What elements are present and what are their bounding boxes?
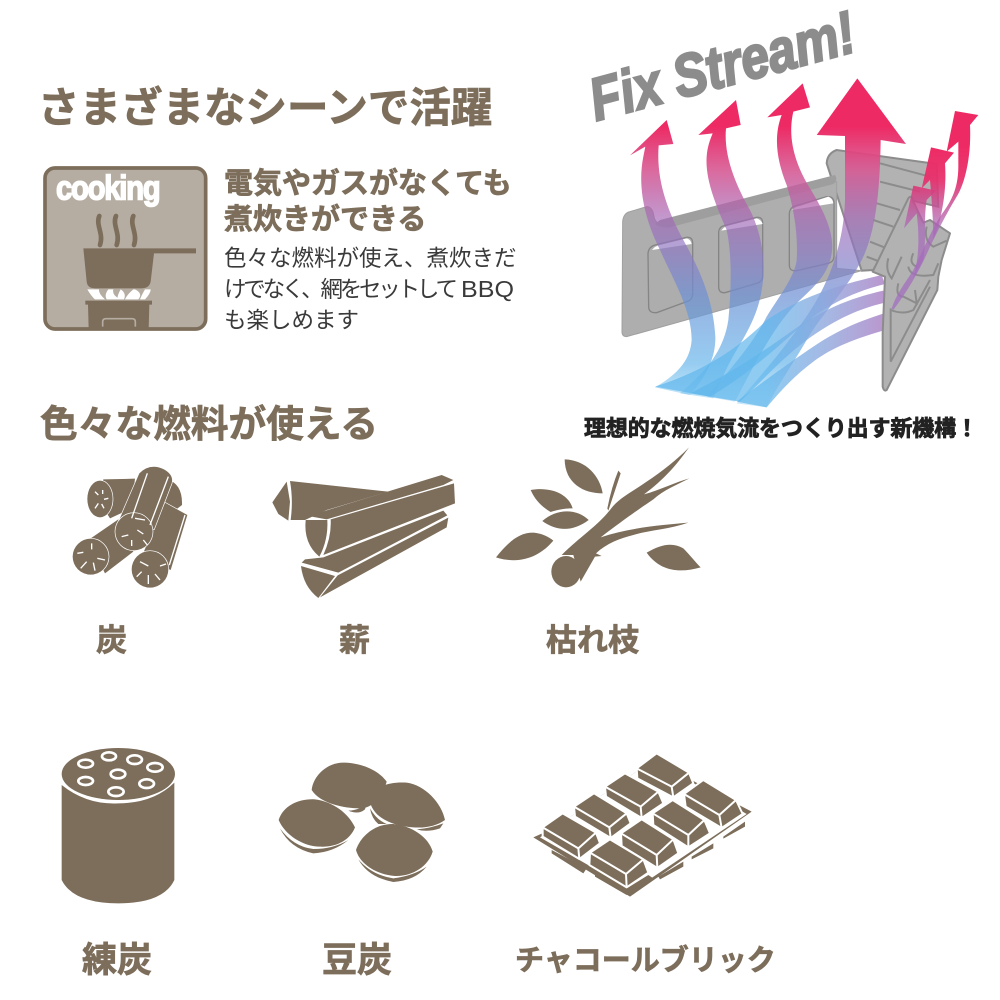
title: さまざまなシーンで活躍 <box>38 84 492 131</box>
icon: charcoal bricks <box>533 753 752 897</box>
label: twigs: 枯れ枝 <box>546 623 639 658</box>
heading: cooking without power: 電気やガスがなくても <box>224 166 512 200</box>
text block: cooking description: けでなく、網をセットして <box>224 277 458 302</box>
stream arrow 2 <box>680 100 764 398</box>
icon: twigs <box>496 447 701 587</box>
heading: cooking without power <box>224 166 512 236</box>
icon: round briquettes <box>279 763 445 882</box>
caption: 理想的な燃焼気流をつくり出す新機構！ <box>584 416 978 441</box>
heading: cooking without power: 煮炊きができる <box>224 202 426 236</box>
low streams <box>655 275 885 397</box>
icon: cooking: cooking <box>56 168 161 207</box>
label: coal briquette: 練炭 <box>82 941 152 980</box>
stream arrow 4 large <box>737 78 906 407</box>
label: firewood: 薪 <box>339 623 370 658</box>
label: round briquette: 豆炭 <box>322 941 392 980</box>
text block: cooking description: も楽しめます <box>224 308 359 333</box>
icon: coal briquette <box>62 748 175 903</box>
back panel slats <box>827 150 938 271</box>
text block: cooking description: BBQ <box>461 276 514 302</box>
stream arrow 3 <box>707 83 832 402</box>
icon: cooking <box>45 168 206 329</box>
icon: charcoal <box>73 467 187 588</box>
diagram: fire stand with airflow <box>622 78 978 407</box>
icon: firewood <box>272 475 455 598</box>
text block: cooking description <box>224 246 517 333</box>
text block: cooking description: 色々な燃料が使え、煮炊きだ <box>224 246 517 271</box>
title: Fix Stream: Fix Stream! <box>582 0 862 134</box>
right stream arrows <box>892 111 978 310</box>
heading: fuels: 色々な燃料が使える <box>40 403 378 445</box>
label: charcoal briquette: チャコールブリック <box>515 943 776 977</box>
label: charcoal: 炭 <box>96 623 127 658</box>
front panel <box>622 175 862 337</box>
stream arrow 1 <box>630 120 715 395</box>
side panel <box>873 197 950 391</box>
